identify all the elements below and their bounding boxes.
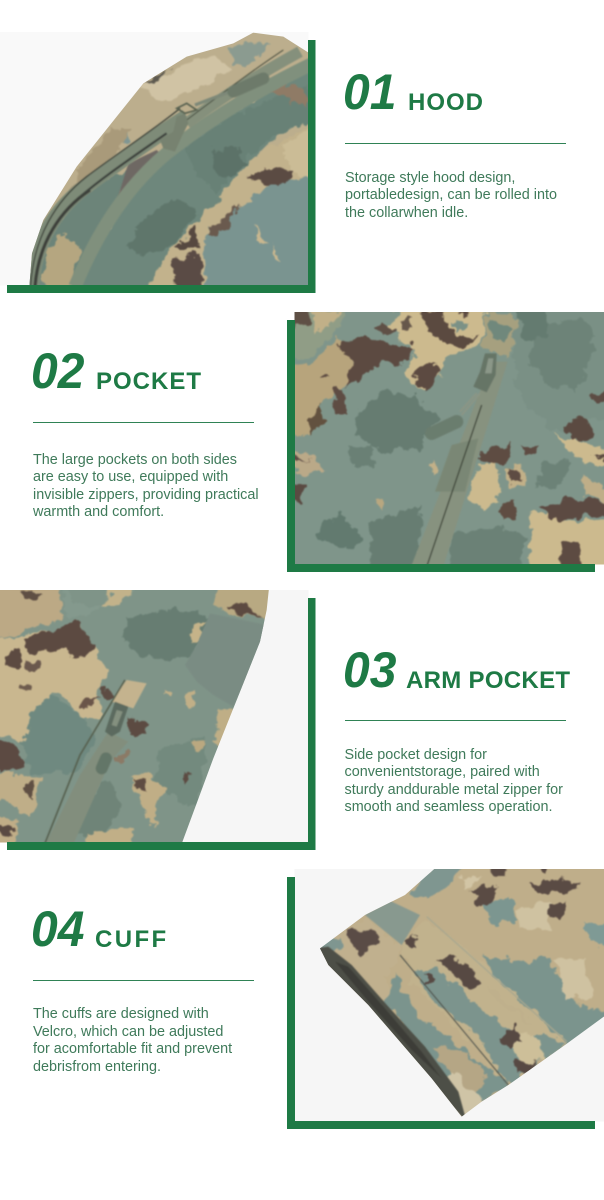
text: arm pocket description: convenientstorage, paired with: [344, 764, 540, 780]
zipper pull tab: [102, 758, 106, 768]
green frame: pocket: [287, 320, 595, 572]
text: arm pocket description: smooth and seamless operation.: [344, 799, 552, 815]
outer zipper tape: [32, 117, 187, 287]
text: cuff description: debrisfrom entering.: [33, 1059, 161, 1075]
text: arm pocket description: [344, 747, 563, 815]
heading: 03 arm pocket: ARM POCKET: [406, 667, 570, 694]
text: cuff description: Velcro, which can be adjusted: [33, 1024, 223, 1040]
sleeve camo fabric: [320, 869, 604, 1116]
cuff lining: [315, 947, 467, 1122]
hood lining opening: [118, 150, 159, 194]
text: hood description: [345, 170, 557, 221]
text: cuff description: for acomfortable fit and prevent: [33, 1041, 232, 1057]
text: arm pocket description: sturdy anddurable metal zipper for: [344, 782, 563, 798]
green frame: cuff: [287, 877, 595, 1129]
text: hood description: Storage style hood design,: [345, 170, 515, 186]
flap edge stitch: [427, 917, 567, 1042]
heading: 01 hood: 01: [343, 65, 396, 120]
green frame: arm pocket: [7, 598, 316, 850]
text: pocket description: The large pockets on both sides: [33, 452, 237, 468]
green frame: hood: [7, 40, 316, 293]
zipper cords: [460, 394, 478, 414]
photo: pocket: [294, 312, 604, 564]
arm camo fabric: [0, 590, 269, 842]
divider 1: [345, 143, 566, 144]
heading: 03 arm pocket: [343, 643, 570, 698]
text: hood description: the collarwhen idle.: [345, 205, 468, 221]
heading: 01 hood: HOOD: [408, 89, 484, 116]
text: pocket description: [33, 452, 259, 520]
heading: 04 cuff: [31, 901, 169, 957]
pocket camo fabric: [294, 312, 604, 564]
photo: arm pocket: [0, 590, 308, 842]
inner zipper tape: [75, 60, 320, 287]
divider 4: [33, 980, 254, 981]
text: pocket description: warmth and comfort.: [33, 504, 164, 520]
zipper slider: [473, 353, 497, 392]
zipper tape: [409, 362, 508, 572]
velcro patch: [190, 619, 264, 705]
zipper slider: [105, 702, 128, 737]
heading: 04 cuff: CUFF: [95, 926, 169, 952]
text: cuff description: [33, 1006, 232, 1075]
zipper slider and pull: [160, 113, 188, 152]
zipper pull tab: [432, 422, 457, 433]
heading: 01 hood: [343, 65, 484, 120]
photo: cuff: [294, 855, 604, 1132]
hood camo fabric: [30, 32, 308, 285]
divider 3: [345, 720, 566, 721]
text: pocket description: are easy to use, equipped with: [33, 469, 228, 485]
heading: 02 pocket: [31, 344, 202, 399]
zipper tape: [42, 732, 128, 852]
velcro tab: [365, 900, 420, 945]
heading: 03 arm pocket: 03: [343, 643, 396, 698]
sleeve pocket: [112, 680, 147, 708]
divider 2: [33, 422, 254, 423]
text: hood description: portabledesign, can be rolled into: [345, 187, 557, 203]
heading: 02 pocket: POCKET: [96, 368, 202, 395]
text: cuff description: The cuffs are designed with: [33, 1006, 209, 1022]
heading: 02 pocket: 02: [31, 344, 84, 399]
photo: hood: [30, 32, 308, 285]
text: pocket description: invisible zippers, providing practical: [33, 486, 259, 502]
heading: 04 cuff: 04: [31, 901, 84, 957]
text: arm pocket description: Side pocket design for: [344, 747, 487, 763]
